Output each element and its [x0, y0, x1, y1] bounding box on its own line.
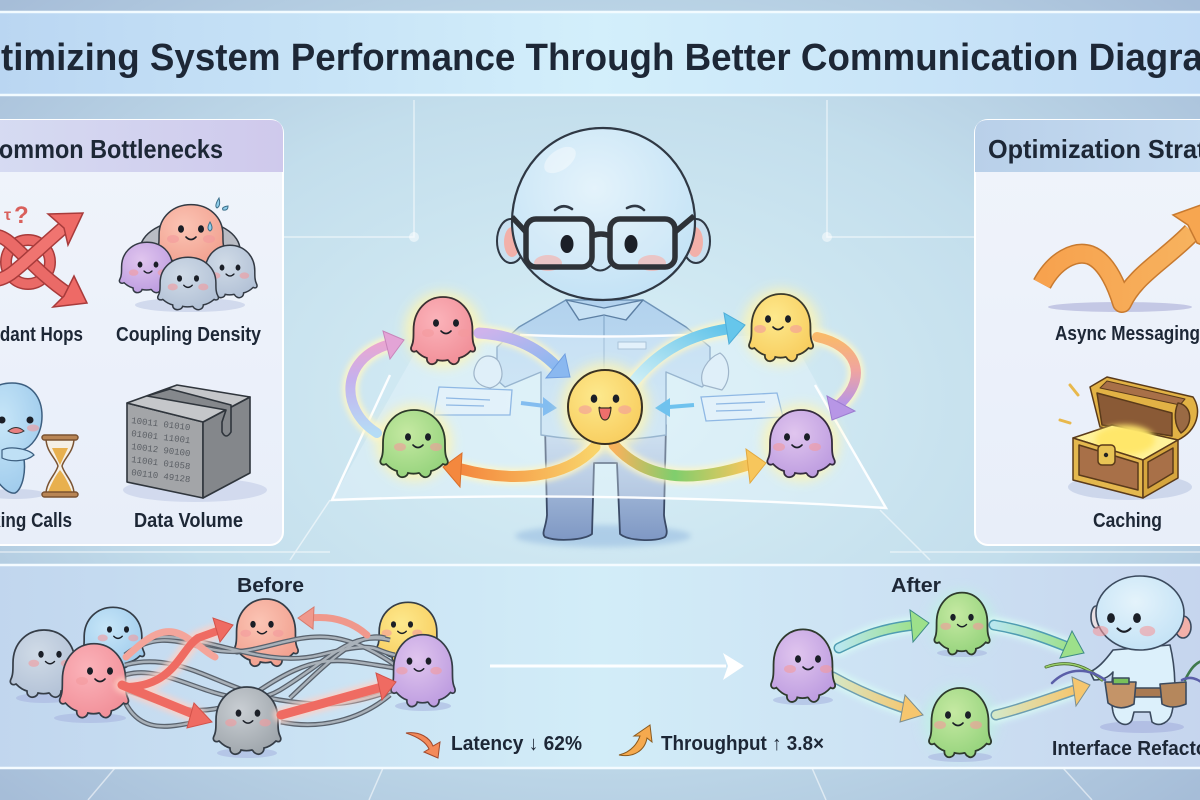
node: yellow	[749, 294, 813, 361]
hourglass	[42, 435, 78, 497]
blob: grey blue	[10, 630, 78, 697]
icon: treasure chest	[1060, 377, 1198, 500]
metric: throughput: Throughput ↑ 3.8×	[661, 733, 824, 755]
node: purple	[767, 410, 835, 477]
red arrows	[122, 607, 396, 728]
blob: green top	[934, 593, 990, 654]
icon: data box: 00110 49128	[131, 468, 191, 485]
blob: purple	[391, 635, 455, 707]
small arrows to center node	[521, 397, 694, 417]
icon: data box	[123, 385, 267, 502]
icon: down arrow	[406, 733, 440, 758]
tangled cables	[122, 637, 395, 726]
icon: tangled red arrows	[0, 202, 87, 307]
icon: data box: 10011 01010	[131, 416, 191, 433]
communication arrows	[350, 313, 856, 487]
metric: throughput	[619, 725, 824, 756]
node: central yellow	[568, 370, 642, 444]
node: pink	[411, 297, 475, 364]
translucent diagram sheet	[332, 335, 886, 508]
hands	[474, 356, 502, 388]
transition arrow	[490, 653, 744, 680]
eyes	[560, 235, 574, 253]
central figure: engineer	[474, 128, 729, 547]
icon: data box: 10012 90100	[131, 442, 191, 459]
metric: latency	[406, 733, 582, 758]
arrow: yellow to purple	[817, 337, 856, 420]
icon: worried blob with hourglass	[0, 383, 78, 499]
torso	[497, 300, 710, 440]
after diagram	[771, 576, 1200, 762]
blob: grey	[213, 687, 281, 754]
panel: optimization strategies	[975, 120, 1200, 545]
blob: pink	[60, 644, 128, 718]
message cards	[434, 387, 783, 421]
arrow: center to yellow	[635, 313, 745, 380]
panel header	[975, 120, 1200, 172]
cheeks	[534, 255, 562, 271]
arrow: pink to center	[479, 333, 570, 378]
cables	[1046, 660, 1200, 685]
legs	[543, 425, 667, 540]
label: data volume: Data Volume	[134, 510, 243, 532]
blob: salmon	[234, 599, 298, 666]
label: caching: Caching	[1093, 510, 1162, 532]
arrow glow	[350, 329, 856, 476]
blob: blue	[82, 607, 144, 668]
glasses	[512, 216, 694, 267]
brows	[555, 206, 644, 210]
panel: common bottlenecks	[0, 120, 283, 545]
icon: crowded worried blobs	[119, 198, 257, 312]
metric: latency: Latency ↓ 62%	[451, 733, 582, 755]
ears	[497, 219, 525, 263]
icon: tangled red arrows: ?	[14, 202, 29, 229]
node: green	[380, 410, 448, 477]
refactor character	[1046, 576, 1200, 724]
arrow: green to pink	[350, 331, 404, 433]
icon: tangled red arrows: τ	[4, 207, 11, 224]
arrow: center to purple	[614, 445, 766, 483]
arrow: center to green	[443, 447, 595, 487]
title banner	[0, 12, 1200, 95]
icon: async arrow	[1042, 200, 1200, 312]
head	[512, 128, 695, 300]
label: coupling density: Coupling Density	[116, 324, 262, 346]
before heading: Before	[237, 575, 304, 597]
blob: green bottom	[929, 688, 991, 757]
red arrow glow	[122, 630, 382, 716]
tangled before diagram	[10, 599, 455, 758]
bottom band: before and after	[0, 565, 1200, 768]
icon: up arrow	[619, 725, 652, 756]
icon: data box: 01001 11001	[131, 429, 191, 446]
after heading: After	[891, 575, 941, 597]
panel header	[0, 120, 283, 172]
blob: yellow	[377, 602, 439, 663]
glow halos	[376, 289, 839, 481]
blob: purple sender	[771, 629, 835, 702]
arrows	[833, 610, 1090, 722]
tool belt	[1132, 688, 1162, 697]
arrow glow	[833, 625, 1075, 715]
icon: data box: 11001 01058	[131, 455, 191, 472]
